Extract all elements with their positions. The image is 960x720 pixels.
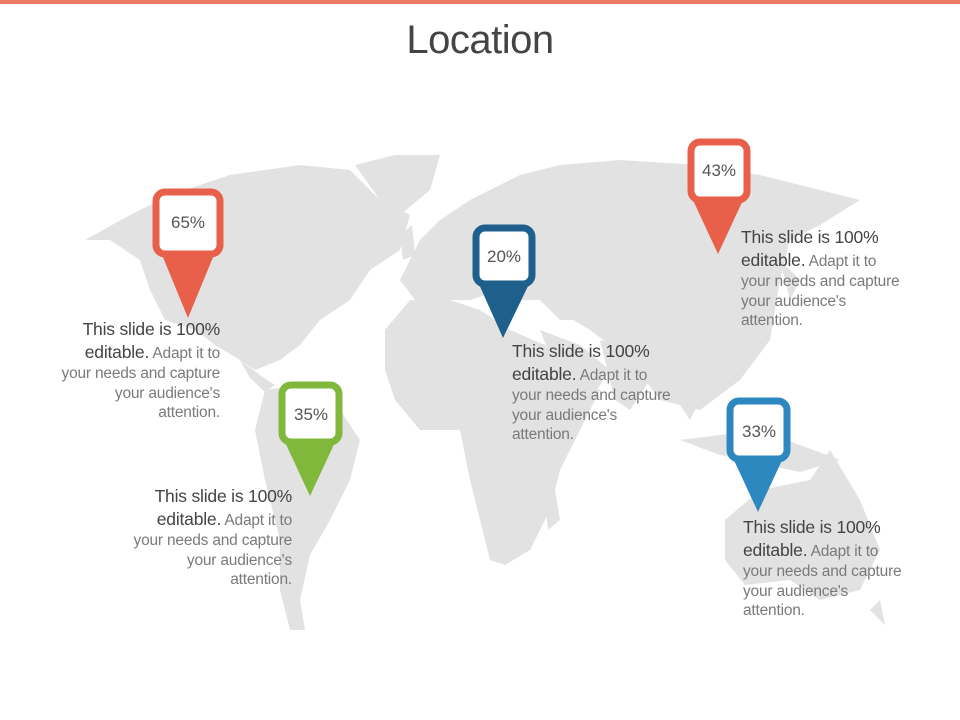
- text: 43%: [741, 227, 899, 329]
- text: 20%: This slide is 100%: [512, 341, 649, 361]
- top bar: [0, 0, 960, 4]
- text: 20%: your needs and capture: [512, 387, 670, 404]
- text: 35%: This slide is 100%: [155, 486, 292, 506]
- pin: 20%: 20%: [487, 247, 521, 266]
- title: Location: [406, 18, 554, 62]
- text: 65%: attention.: [158, 404, 220, 421]
- text: 35%: editable. Adapt it to: [157, 509, 292, 529]
- text: 33%: This slide is 100%: [743, 517, 880, 537]
- pin: 65%: 65%: [171, 213, 205, 232]
- pin: 33%: 33%: [742, 422, 776, 441]
- text: 65%: This slide is 100%: [83, 319, 220, 339]
- text: 43%: editable. Adapt it to: [741, 250, 876, 270]
- text: 43%: your needs and capture: [741, 273, 899, 290]
- text: 43%: your audience's: [741, 292, 846, 310]
- text: 65%: your audience's: [115, 384, 220, 402]
- text: 20%: your audience's: [512, 406, 617, 424]
- text: 65%: [62, 319, 220, 421]
- pin: 43%: 43%: [702, 161, 736, 180]
- text: 65%: editable. Adapt it to: [85, 342, 220, 362]
- text: 20%: editable. Adapt it to: [512, 364, 647, 384]
- text: 33%: your audience's: [743, 582, 848, 600]
- text: 20%: [512, 341, 670, 443]
- text: 35%: your needs and capture: [134, 532, 292, 549]
- text: 65%: your needs and capture: [62, 365, 220, 382]
- text: 35%: [134, 486, 292, 588]
- text: 33%: [743, 517, 901, 619]
- text: 20%: attention.: [512, 426, 574, 443]
- text: 35%: attention.: [230, 571, 292, 588]
- text: 43%: This slide is 100%: [741, 227, 878, 247]
- text: 33%: your needs and capture: [743, 563, 901, 580]
- pin: 35%: 35%: [294, 405, 328, 424]
- text: 33%: attention.: [743, 602, 805, 619]
- text: 33%: editable. Adapt it to: [743, 540, 878, 560]
- text: 43%: attention.: [741, 312, 803, 329]
- text: 35%: your audience's: [187, 552, 292, 568]
